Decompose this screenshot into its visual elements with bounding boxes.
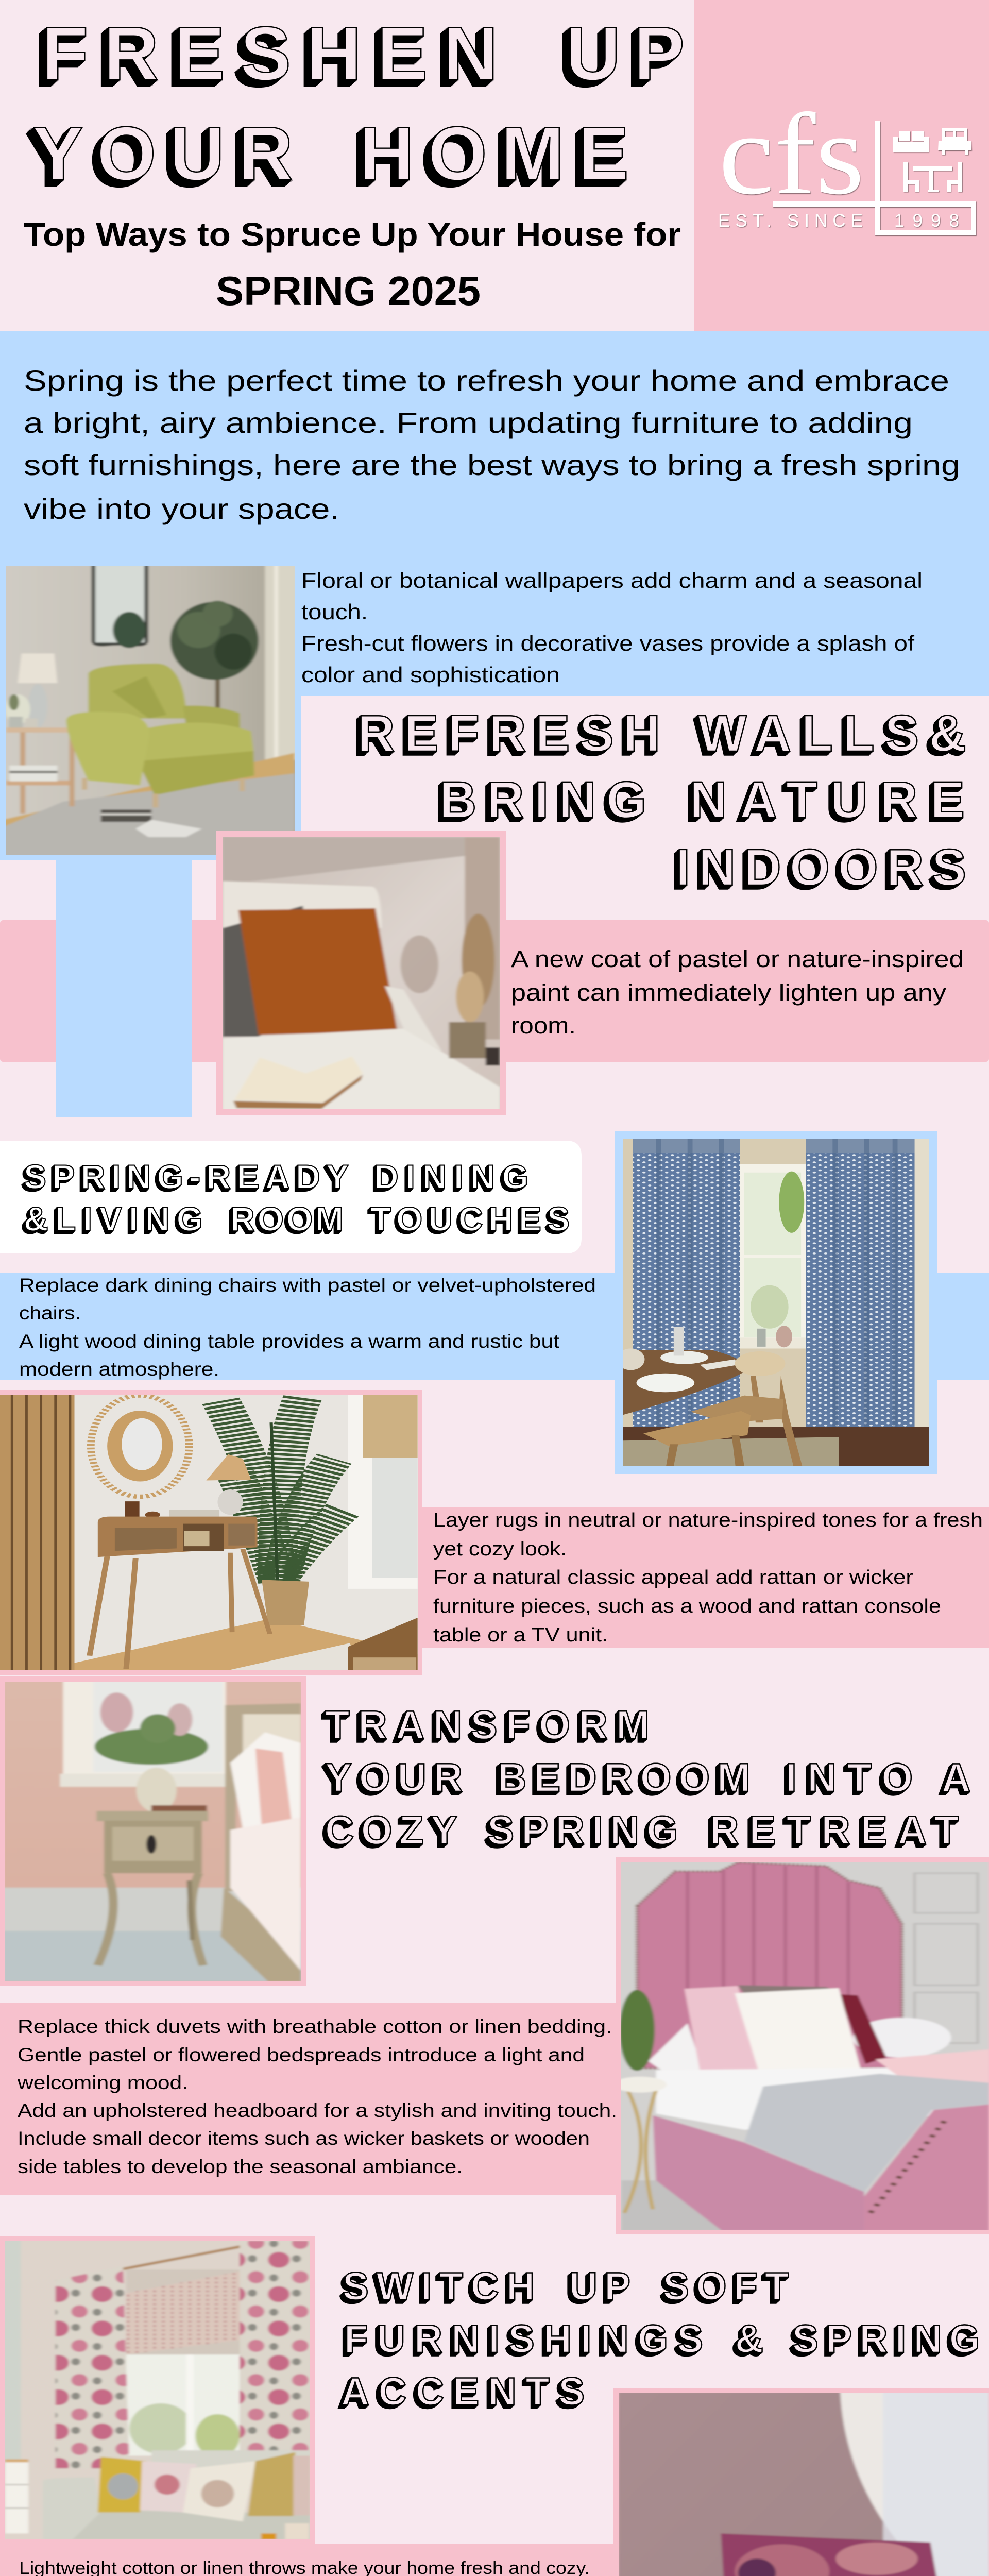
photo frame: floral curtains	[0, 2236, 315, 2545]
panel: blue band beside armchair photo	[0, 696, 301, 860]
heading: switch up soft furnishings: SOFT	[663, 2265, 789, 2309]
title: YOUR	[32, 111, 293, 196]
panel: white heading box	[0, 1141, 582, 1253]
text: dining chairs and table: chairs.	[19, 1302, 81, 1324]
heading: switch up soft furnishings: FURNISHINGS	[344, 2317, 703, 2361]
heading: dining and living room: &LIVING	[24, 1200, 203, 1238]
title: UP	[566, 11, 685, 96]
heading: transform your bedroom: A	[942, 1755, 970, 1800]
panel: pink bedroom text band	[0, 2003, 616, 2195]
text: bedroom tips	[17, 2016, 617, 2177]
icon: cfs logo	[718, 90, 976, 235]
heading: transform your bedroom: COZY	[325, 1807, 457, 1853]
heading: refresh walls: WALLS&	[698, 705, 966, 762]
intro text: a bright, airy ambience. From updating furniture to adding	[24, 406, 913, 439]
text: rugs and rattan: furniture pieces, such as a wood and rattan console	[433, 1596, 941, 1617]
photo: floral cushion on bed	[618, 2392, 989, 2576]
panel: vertical blue bar	[56, 860, 192, 1117]
text: new coat of paint: A new coat of pastel or nature-inspired	[511, 946, 964, 972]
photo frame: rust cushion	[216, 831, 506, 1115]
heading: switch up soft furnishings: SWITCH	[343, 2265, 535, 2309]
text: bedroom tips: Replace thick duvets with breathable cotton or linen bedding.	[18, 2016, 612, 2037]
text: bedroom tips: welcoming mood.	[17, 2072, 188, 2093]
heading: dining and living room: TOUCHES	[370, 1200, 570, 1238]
heading: switch up soft furnishings: SPRING	[792, 2317, 980, 2361]
icon: cfs logo: 1998	[894, 211, 959, 231]
panel: pink rugs band	[422, 1507, 989, 1648]
text: wallpapers and flowers: touch.	[301, 600, 368, 624]
heading: refresh walls: BRING	[439, 771, 646, 829]
icon: cfs logo: EST. SINCE	[718, 211, 863, 231]
text: new coat of paint: paint can immediately lighten up any	[511, 979, 947, 1006]
text: rugs and rattan	[433, 1510, 983, 1646]
heading: transform your bedroom: TRANSFORM	[325, 1702, 650, 1748]
panel: header logo background	[694, 0, 989, 331]
heading: switch up soft furnishings: &	[735, 2317, 763, 2361]
intro text: vibe into your space.	[24, 493, 339, 525]
panel: blue dining band	[0, 1273, 989, 1380]
photo: green armchair living room	[3, 565, 297, 858]
photo: floral curtains and sofa	[3, 2239, 312, 2540]
title: FRESHEN	[42, 11, 498, 96]
intro text: soft furnishings, here are the best ways to bring a fresh spring	[24, 449, 960, 481]
photo: blue curtains and dining table	[617, 1137, 930, 1468]
heading: refresh walls	[357, 705, 966, 896]
text: bedroom tips: Add an upholstered headboard for a stylish and inviting touch.	[18, 2100, 617, 2121]
text: dining chairs and table: A light wood dining table provides a warm and rustic but	[19, 1331, 560, 1352]
heading: refresh walls: NATURE	[690, 771, 965, 829]
heading: dining and living room	[24, 1158, 570, 1238]
photo frame: bedside table	[0, 1676, 306, 1986]
heading: dining and living room: ROOM	[230, 1200, 344, 1238]
panel: pink soft furnishings text band	[0, 2544, 613, 2576]
intro text: Spring is the perfect time to refresh your home and embrace	[24, 364, 949, 397]
text: dining chairs and table: modern atmosphere.	[19, 1359, 219, 1380]
text: rugs and rattan: For a natural classic appeal add rattan or wicker	[433, 1567, 913, 1588]
intro text	[24, 364, 960, 525]
title	[32, 11, 685, 196]
text: rugs and rattan: yet cozy look.	[433, 1538, 567, 1560]
icon: cfs logo: cfs	[719, 90, 864, 218]
text: wallpapers and flowers: Floral or botanical wallpapers add charm and a seasonal	[301, 568, 923, 592]
text: wallpapers and flowers: Fresh-cut flowers in decorative vases provide a splash of	[301, 631, 914, 655]
text: rugs and rattan: table or a TV unit.	[433, 1624, 608, 1646]
text: wallpapers and flowers	[301, 568, 923, 687]
heading: transform your bedroom: YOUR	[325, 1755, 463, 1800]
photo frame: blue curtains	[615, 1131, 937, 1474]
subtitle: SPRING 2025	[216, 268, 481, 314]
subtitle: Top Ways to Spruce Up Your House for	[24, 216, 681, 253]
panel: pink band under heading	[0, 920, 989, 1062]
photo: rust cushion on bed	[221, 836, 502, 1111]
heading: transform your bedroom: BEDROOM	[498, 1755, 751, 1800]
text: new coat of paint: room.	[511, 1012, 576, 1039]
heading: transform your bedroom: RETREAT	[710, 1807, 959, 1853]
text: new coat of paint	[511, 946, 964, 1039]
text: bedroom tips: Include small decor items such as wicker baskets or wooden	[18, 2128, 590, 2149]
photo frame: console table	[0, 1390, 422, 1675]
text: dining chairs and table: Replace dark dining chairs with pastel or velvet-upholstered	[19, 1275, 596, 1296]
heading: refresh walls: INDOORS	[676, 839, 966, 896]
text: bedroom tips: Gentle pastel or flowered bedspreads introduce a light and	[18, 2044, 585, 2065]
text: bedroom tips: side tables to develop the seasonal ambiance.	[18, 2156, 463, 2177]
heading: dining and living room: SPRING-READY	[24, 1158, 349, 1196]
heading: transform your bedroom: INTO	[786, 1755, 913, 1800]
panel: blue intro band	[0, 331, 989, 696]
heading: transform your bedroom: SPRING	[487, 1807, 678, 1853]
heading: switch up soft furnishings: UP	[569, 2265, 630, 2309]
heading: refresh walls: REFRESH	[357, 705, 660, 762]
photo: rattan console and palm	[0, 1394, 419, 1672]
photo frame: floral cushion	[613, 2388, 989, 2576]
text: rugs and rattan: Layer rugs in neutral or nature-inspired tones for a fresh	[433, 1510, 983, 1531]
heading: transform your bedroom	[325, 1702, 970, 1853]
text: wallpapers and flowers: color and sophistication	[301, 663, 560, 687]
subtitle	[24, 216, 681, 314]
heading: switch up soft furnishings: ACCENTS	[341, 2370, 585, 2414]
heading: dining and living room: DINING	[374, 1158, 528, 1196]
photo frame: pink headboard	[616, 1857, 989, 2234]
photo: pink upholstered bed	[613, 1860, 989, 2231]
heading: switch up soft furnishings	[341, 2265, 980, 2414]
photo: bedside table with vase	[3, 1680, 303, 1984]
panel: refresh walls heading background	[301, 696, 989, 920]
text: dining chairs and table	[19, 1275, 596, 1380]
title: HOME	[359, 111, 629, 196]
